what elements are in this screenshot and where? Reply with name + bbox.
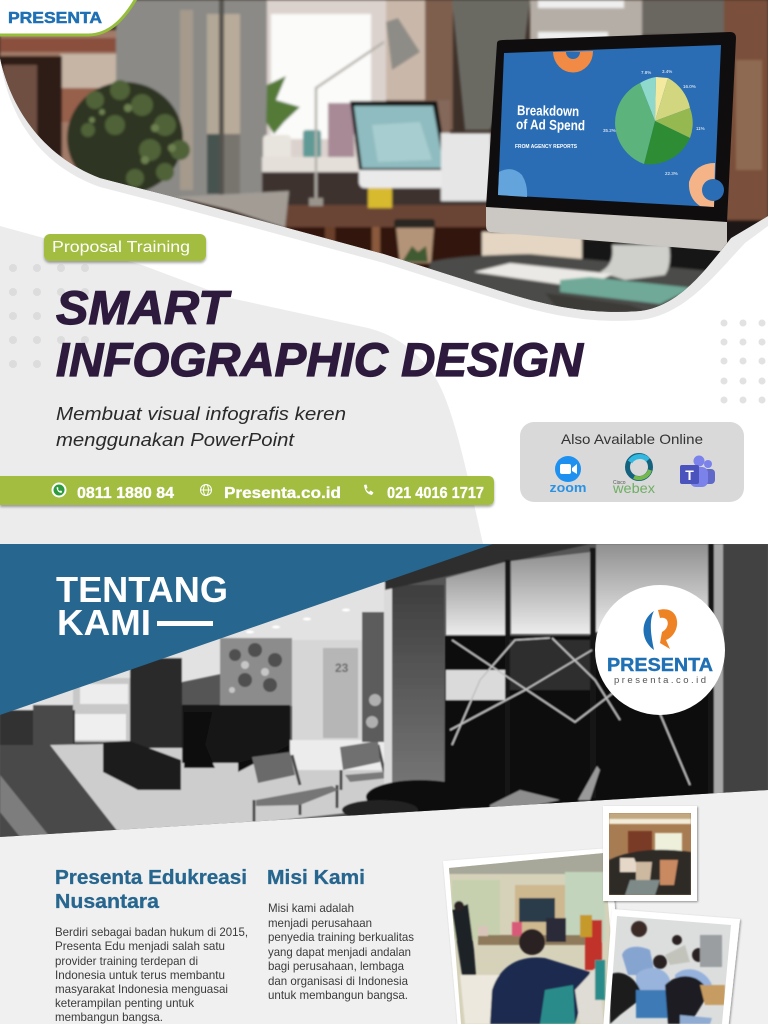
panel: also available online [520,422,744,502]
logo tab top left [0,0,137,35]
plant large [67,80,190,194]
small plant and vase [263,76,354,160]
keyboard [474,263,613,288]
ceiling [11,582,386,712]
heading: presenta edukreasi nusantara [55,867,247,913]
wood chair 1 [254,755,337,822]
website: Presenta.co.id [224,485,341,502]
heading: tentang kami [56,569,228,643]
reception desk [182,705,290,763]
heading: misi kami: Misi Kami [267,867,365,889]
curtain far right [642,0,724,35]
wooden desk [285,205,490,269]
screen decoration: light blue circle [498,169,527,197]
brick wall centre [386,0,453,136]
papers [547,294,644,312]
plant in cup [402,246,428,262]
text block: company description: Indonesia untuk terus membantu [55,968,225,982]
logo tab top left: PRESENTA [8,10,102,27]
panel: also available online: Also Available Online [561,431,703,447]
window [267,0,386,160]
office photo grayscale [0,544,768,844]
text block: company description: keterampilan penting untuk [55,996,195,1010]
screen title [515,105,584,148]
title: SMART [56,281,232,334]
floor [50,740,392,837]
text block: company description: masyarakat Indonesia menguasai [55,982,228,996]
small monitor [350,101,448,208]
pie labels: 3.4% [662,69,672,74]
white box behind monitor [441,133,491,201]
text block: company description: membangun bangsa. [55,1010,163,1024]
logo circle [595,585,725,715]
text block: mission: dan organisasi di Indonesia [268,974,408,988]
right wall [722,544,768,794]
pie chart [615,77,693,164]
pie labels [603,69,705,176]
blue banner [0,544,493,715]
icon: webex: webex [612,480,655,496]
screen title: Breakdown [517,102,579,119]
badge: proposal training: Proposal Training [52,239,190,256]
photo: training room large [440,848,630,1024]
office number: 021 4016 1717 [387,485,484,502]
frames [505,544,714,800]
icon: teams [680,456,715,487]
text block: company description: provider training terdepan di [55,954,198,968]
photo: seminar audience [603,806,697,901]
glass top [446,562,505,635]
screen title: FROM AGENCY REPORTS [515,144,577,150]
pie labels: 22.3% [665,171,678,176]
heading: tentang kami: KAMI [57,602,151,643]
text block: mission: bagi perusahaan, lembaga [268,959,404,973]
text block: mission: Misi kami adalah [268,901,354,915]
text block: mission: yang dapat menjadi andalan [268,945,411,959]
lamp [309,18,420,206]
plant at glass [362,612,384,742]
top frame [385,544,590,590]
screen decoration: peach ring [689,163,724,207]
text block: company description: Berdiri sebagai badan hukum di 2015, [55,925,248,939]
text block: mission: untuk membangun bangsa. [268,988,408,1002]
coffee cup [394,219,435,263]
large monitor [486,32,736,251]
curtains right [452,0,530,130]
brick wall left [0,28,118,168]
room number: 23 [335,661,349,675]
icon: teams: T [685,467,694,483]
pie labels: 35.2% [603,128,616,133]
panel: hero gray background shape [0,226,483,544]
icon: zoom: zoom [550,480,586,495]
door panel [392,585,444,805]
contact bar [0,476,494,505]
ceiling lights [246,608,350,634]
screen decoration: orange ring [553,51,593,73]
grey desk [427,252,706,312]
pillar [130,658,182,748]
panel: hero light gray band under the photo [0,58,768,321]
logo circle: presenta.co.id [614,675,706,686]
decorative dots left [9,264,89,368]
door [0,54,64,158]
icon: zoom [550,456,586,495]
pie labels: 11% [696,126,705,131]
pie labels: 7.8% [641,70,651,75]
green wall [220,638,292,706]
dark wall [262,172,487,207]
text block: company description [55,925,248,1024]
chair office [184,712,215,768]
glass decals [450,638,690,785]
icon: whatsapp [52,482,66,498]
icon: webex [612,456,655,496]
heading: tentang kami: TENTANG [56,569,228,610]
badge: proposal training [44,234,206,261]
icon: webex: Cisco [613,480,626,486]
notebook [560,277,693,304]
curtains left [116,0,267,200]
bright cushion [490,790,560,815]
title [56,281,584,386]
icon: presenta mark [644,609,677,650]
beige wall under monitor [482,232,582,262]
title: INFOGRAPHIC DESIGN [56,333,584,386]
round table [366,780,474,814]
panel: lower gray background [0,780,768,1024]
screen title: of Ad Spend [516,116,585,133]
shelf [262,157,362,172]
heading: presenta edukreasi nusantara: Presenta Edukreasi [55,867,247,889]
monitor screen [498,45,721,207]
dark under monitor [582,240,727,272]
subtitle: menggunakan PowerPoint [56,430,295,450]
logo circle: PRESENTA [607,655,713,675]
subtitle [56,404,346,450]
text block: mission: penyedia training berkualitas [268,930,414,944]
back wall [292,640,385,740]
brick wall right [722,0,768,244]
dark carpet [0,745,122,837]
lobby wall left [73,678,131,742]
hero photo: workspace with monitor [0,0,768,330]
photo: team at laptop [603,909,740,1024]
phone number: 0811 1880 84 [77,485,174,502]
text block: company description: Presenta Edu menjadi salah satu [55,939,225,953]
wood chair 2 [341,745,385,790]
monitor stand [600,245,670,280]
heading: presenta edukreasi nusantara: Nusantara [55,891,160,913]
pie labels: 16.0% [683,84,696,89]
decorative dots right [720,320,766,404]
window right [530,0,642,40]
icon: globe [200,484,212,496]
icon: phone [364,484,374,495]
dark glass [445,636,713,808]
chair [175,191,289,228]
subtitle: Membuat visual infografis keren [56,404,346,424]
monitor chin [486,207,727,251]
text block: mission: menjadi perusahaan [268,916,372,930]
text block: mission [268,901,414,1002]
planter [103,741,181,790]
